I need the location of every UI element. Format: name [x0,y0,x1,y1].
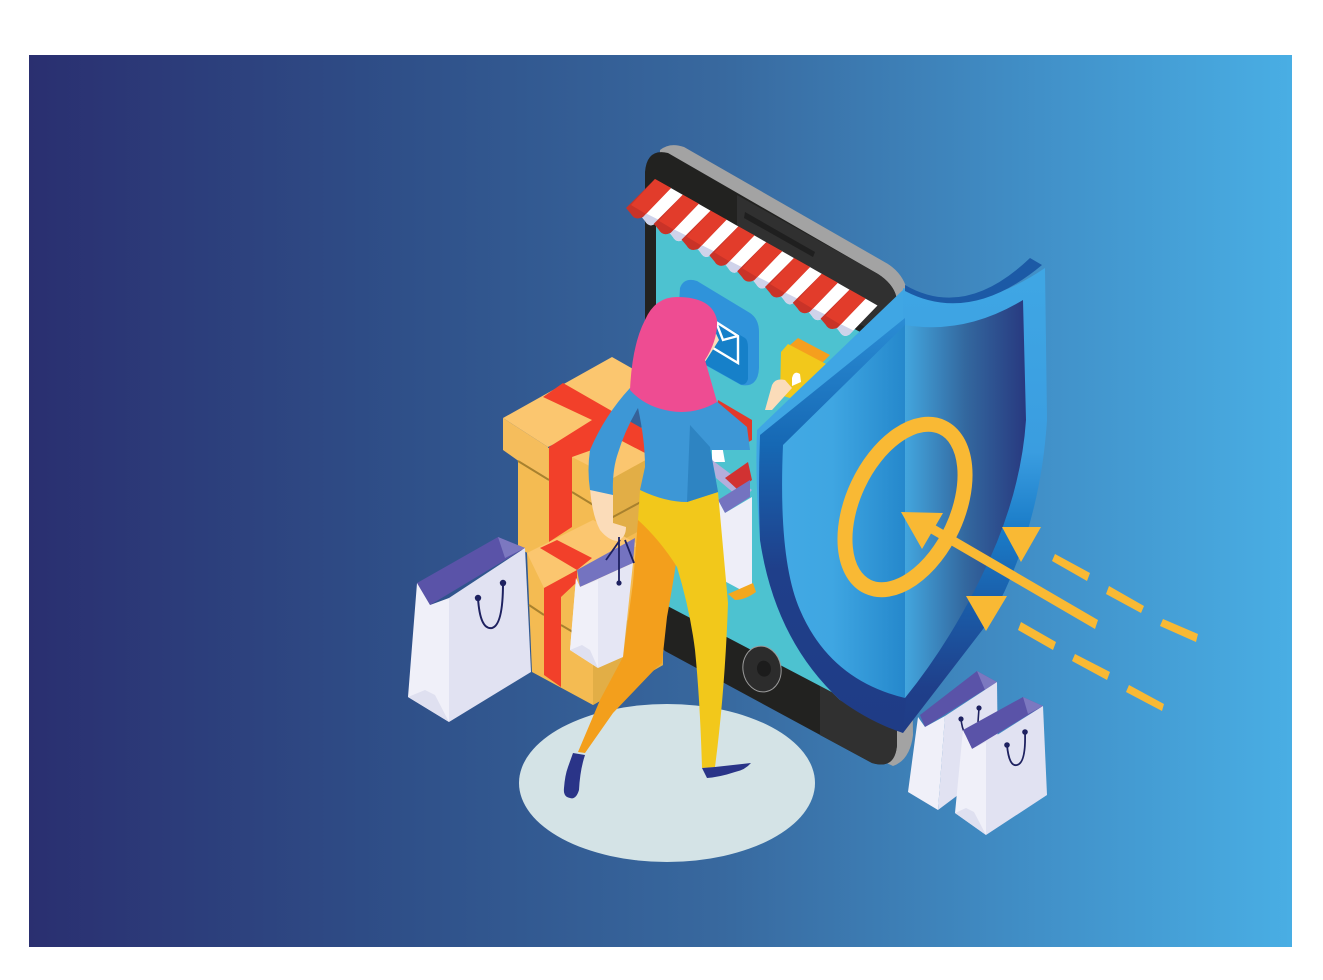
sweater [588,388,750,502]
ground ellipse [519,704,815,862]
icon: yellow tile [780,338,830,398]
bag handle [475,580,506,628]
upper dashed arrow [1002,527,1198,642]
phone speaker [744,212,815,257]
main arrow [901,512,1098,629]
small box ribbon [540,540,592,687]
shield outer edge [756,288,905,733]
person [564,297,751,798]
icon: mail tile [678,280,759,385]
shopping bag: right back [908,671,998,810]
hand bag handles [606,537,634,583]
right shoe [702,763,751,778]
envelope [708,322,738,363]
target ring [821,405,989,609]
back leg [578,520,677,753]
phone screen [656,225,885,720]
shield left face [782,325,905,698]
face [697,325,719,362]
left shoe [564,753,585,798]
front leg [638,490,728,768]
hijab [630,297,717,412]
shield right silhouette [903,268,1047,733]
icon: red tile and tag [712,400,752,500]
large gift box [503,357,670,600]
gift ribbon [543,383,645,542]
shield right face [905,300,1026,698]
shield top edge [905,258,1042,303]
awning [626,179,878,336]
shield [756,258,1047,733]
shopping bag: right front [955,697,1047,835]
small gift box [527,520,663,705]
home button [739,643,785,695]
shopping bag: left [408,537,531,722]
smartphone [645,145,913,766]
lower dashed arrow [966,596,1164,711]
left hand [590,488,626,541]
shopping bag: in hand [570,537,635,668]
front bag handle [1004,729,1028,765]
shield rim [759,318,906,733]
shopping bag: behind person [717,480,756,600]
hand on screen [765,380,792,410]
